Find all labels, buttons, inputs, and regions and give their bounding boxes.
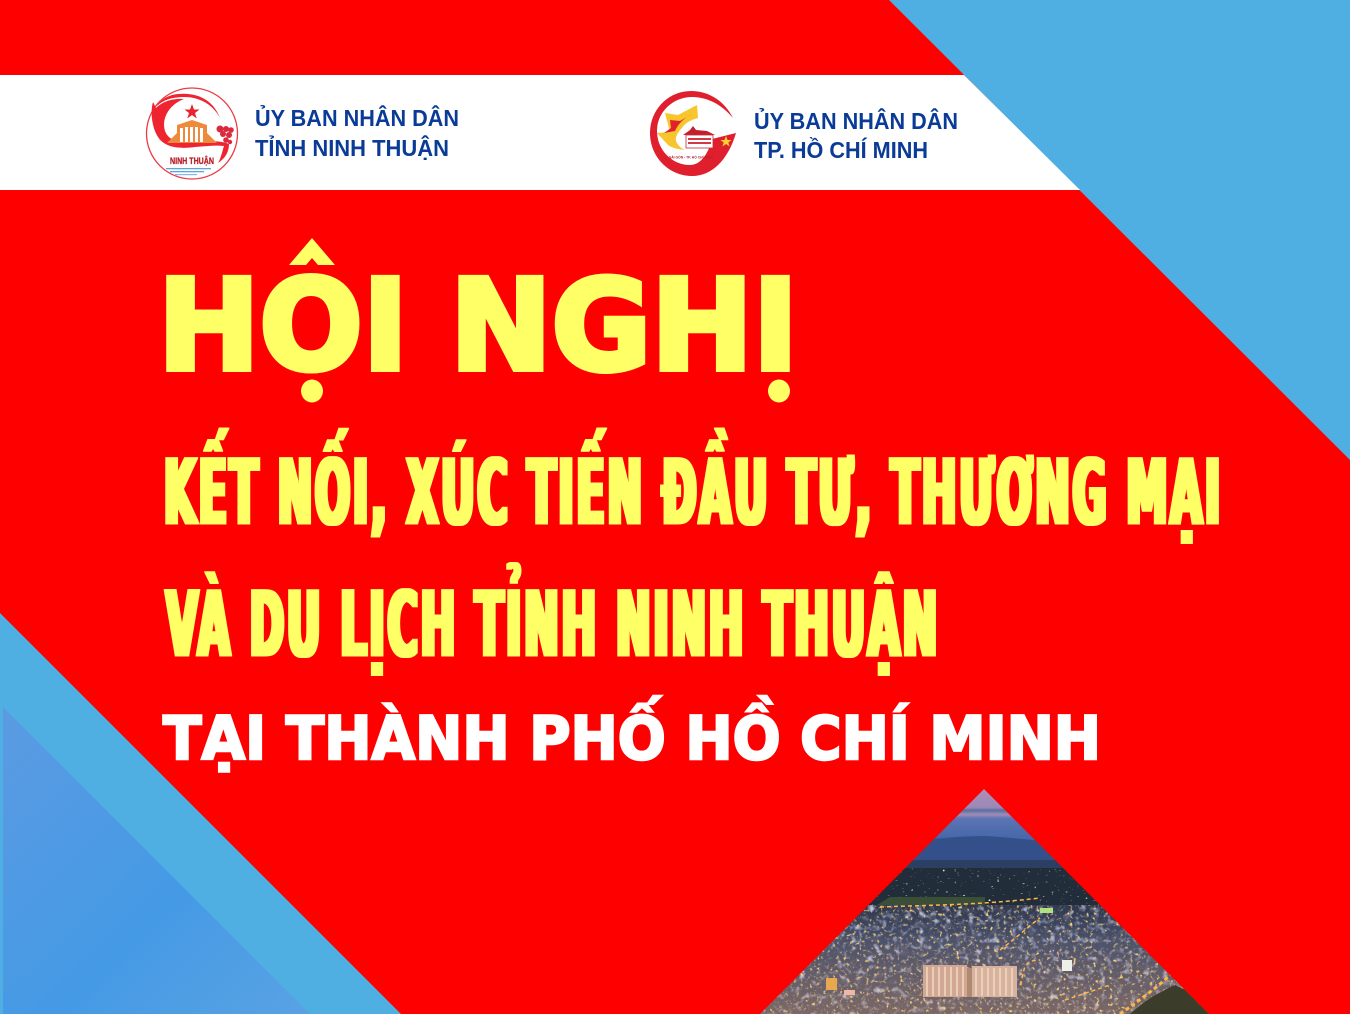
organisation name: Ho Chi Minh City: ỦY BAN NHÂN DÂN — [754, 106, 958, 134]
logo: Ho Chi Minh City — [650, 91, 736, 176]
location line: TẠI THÀNH PHỐ HỒ CHÍ MINH — [163, 695, 1101, 774]
photo: night city skyline in triangle — [760, 789, 1215, 1014]
main title: HỘI NGHỊ — [158, 253, 798, 399]
top right blue triangle — [889, 0, 1350, 460]
organisation name: Ninh Thuan: TỈNH NINH THUẬN — [255, 133, 449, 161]
inner blue triangle — [3, 707, 310, 1014]
organisation name: Ninh Thuan: ỦY BAN NHÂN DÂN — [255, 103, 459, 131]
white logo band — [0, 75, 1080, 190]
logo: Ninh Thuan: NINH THUẬN — [170, 155, 214, 166]
logo: Ninh Thuan — [146, 88, 238, 179]
organisation name: Ho Chi Minh City — [754, 106, 958, 163]
organisation name: Ho Chi Minh City: TP. HỒ CHÍ MINH — [754, 136, 928, 163]
logo: Ho Chi Minh City: SÀI GÒN - TP. HỒ CHÍ MINH — [669, 154, 713, 160]
organisation name: Ninh Thuan — [255, 103, 459, 161]
bottom left blue triangle — [0, 613, 401, 1014]
